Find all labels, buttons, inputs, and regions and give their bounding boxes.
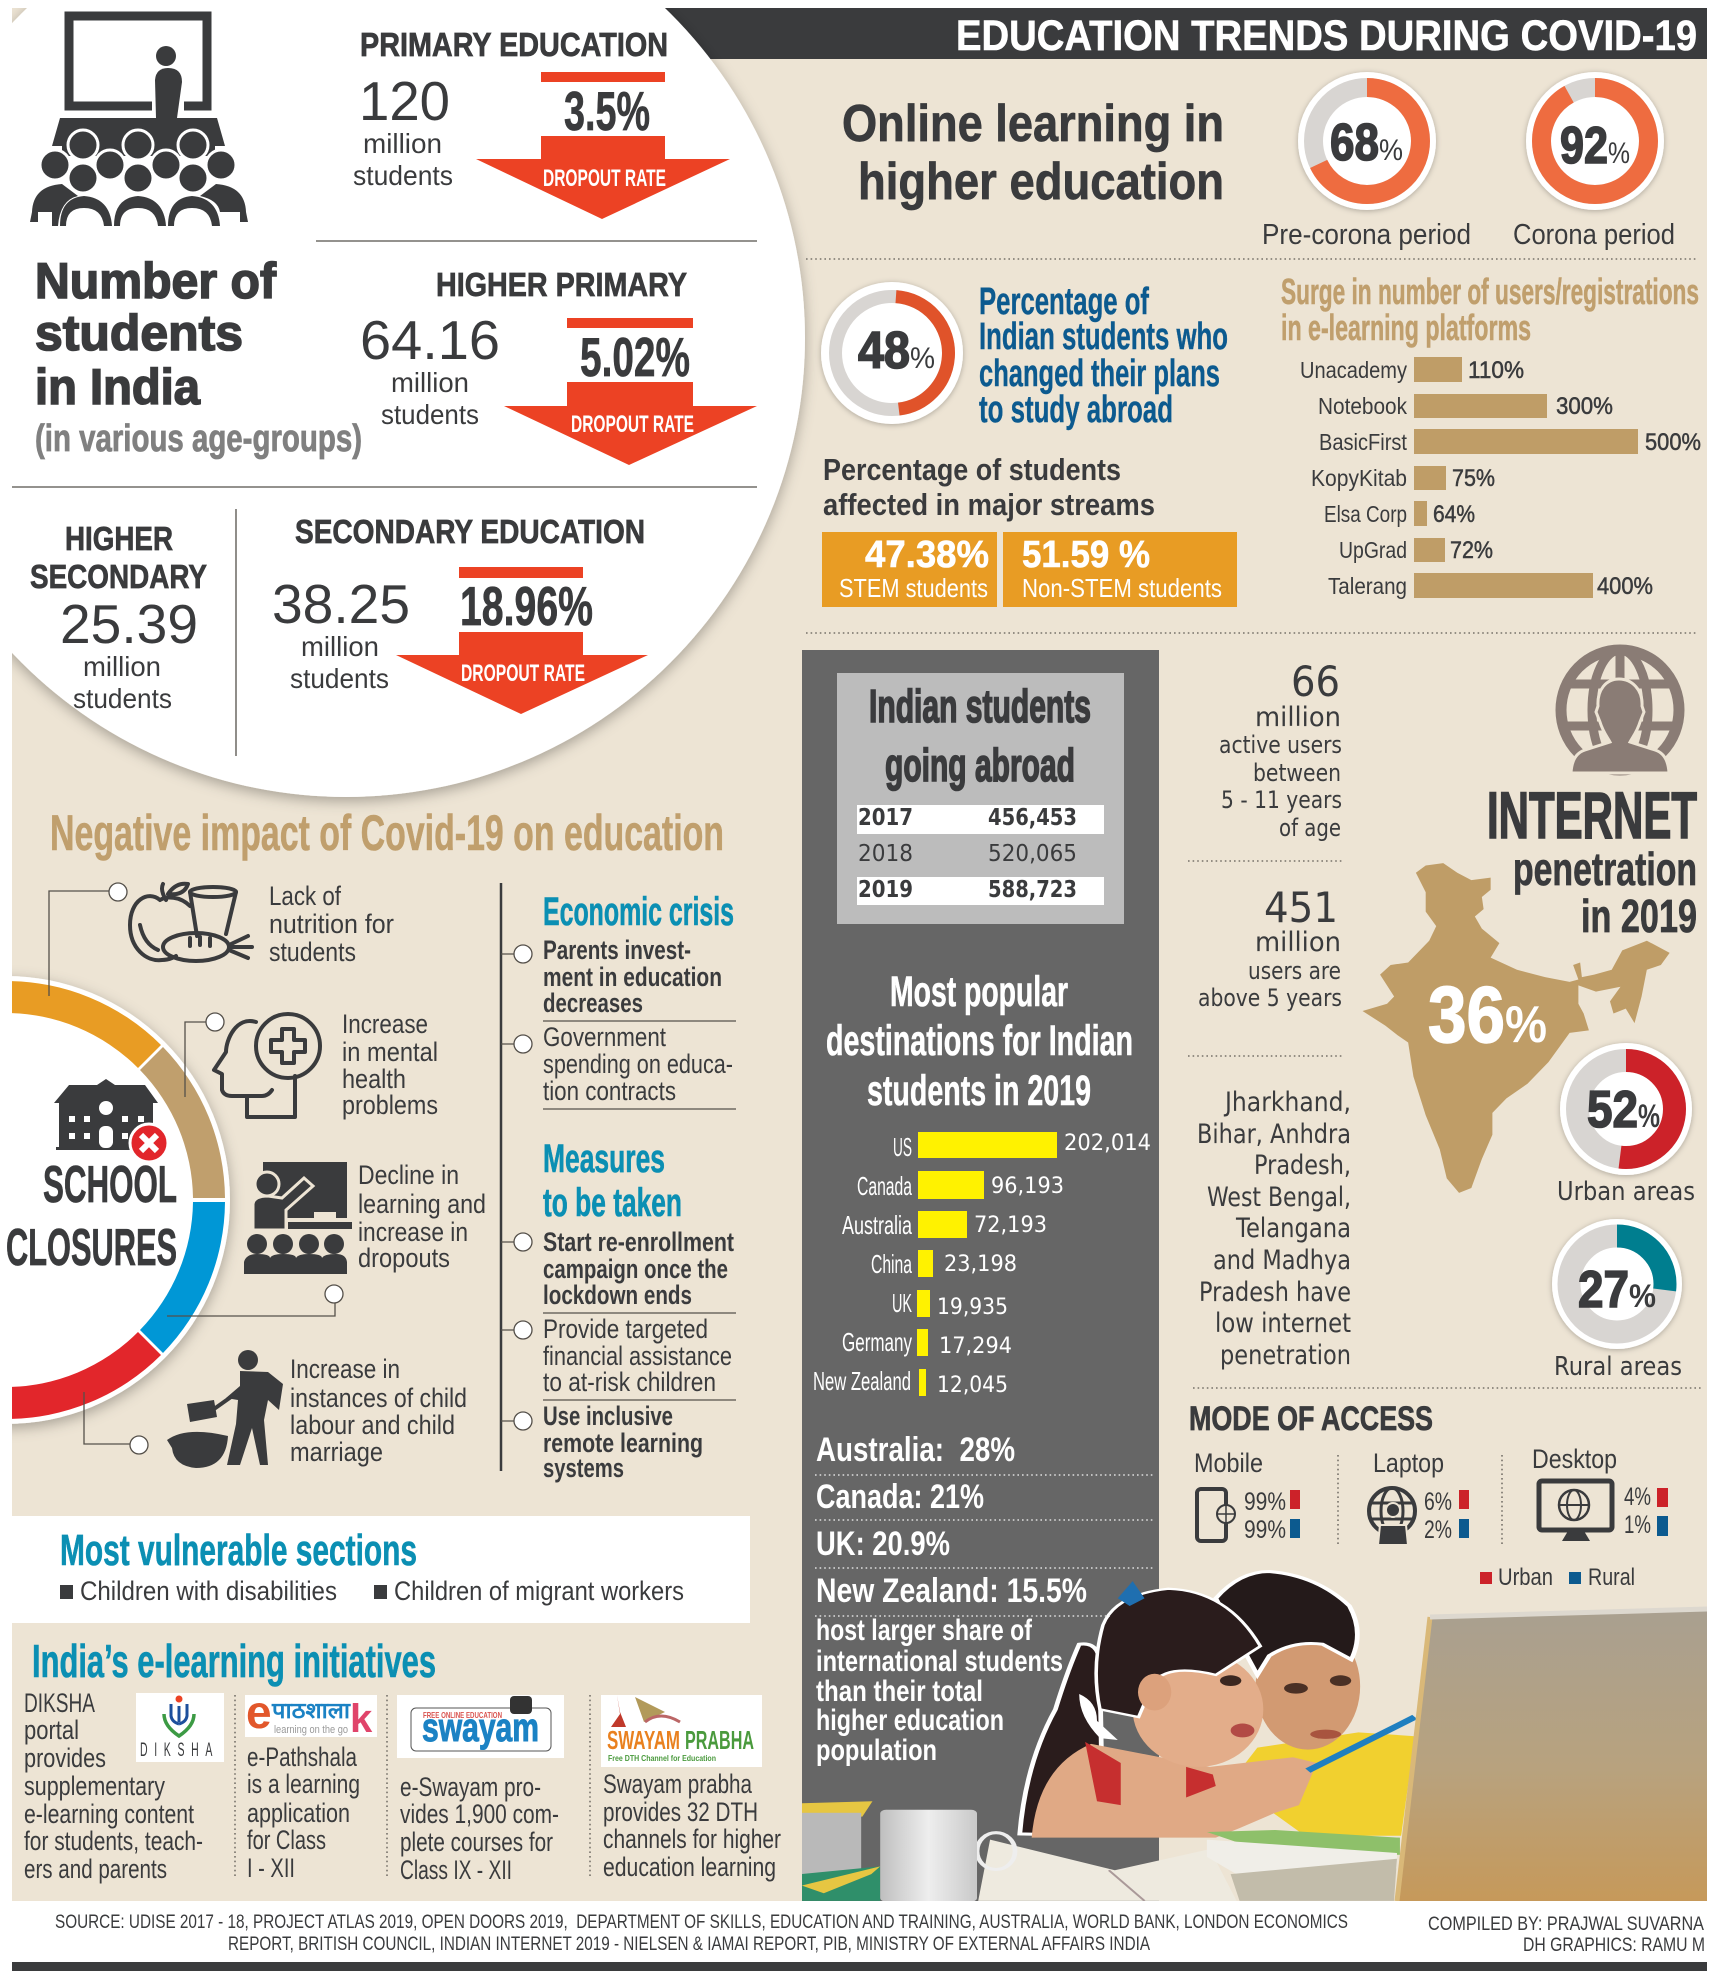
panel: most vulnerable sections: Children of migrant workers xyxy=(394,1576,684,1606)
panel: most vulnerable sections xyxy=(12,1516,750,1623)
text: low penetration states: low internet xyxy=(1215,1308,1351,1339)
bar chart: surge in e-learning platforms: 64% xyxy=(1433,501,1475,528)
bar chart: surge in e-learning platforms: 300% xyxy=(1556,393,1613,420)
donut: urban areas 52% xyxy=(1557,1043,1695,1207)
logo: e-Pathshala xyxy=(245,1686,377,1741)
heading: school closures xyxy=(6,1156,177,1277)
block: higher primary: students xyxy=(381,399,479,430)
footer: sources xyxy=(55,1912,1348,1955)
icon: mental health head xyxy=(214,1014,320,1117)
table: Indian students going abroad: 2019 xyxy=(858,877,913,903)
bar chart: surge in e-learning platforms: Unacademy xyxy=(1300,357,1407,383)
panel: active users text: 66 xyxy=(1291,657,1340,706)
donut: pre-corona 68%: % xyxy=(1379,134,1403,167)
panel: most vulnerable sections: Most vulnerable sections xyxy=(60,1526,417,1575)
connector: child labour xyxy=(84,1392,148,1454)
mode: desktop: Desktop xyxy=(1532,1444,1617,1474)
logo: DIKSHA: DIKSHA xyxy=(140,1740,219,1761)
text: Swayam Prabha: provides 32 DTH xyxy=(603,1797,758,1827)
bar chart: popular destinations: New Zealand xyxy=(813,1366,911,1396)
bar chart: popular destinations: 17,294 xyxy=(939,1334,1012,1359)
heading: number of students: students xyxy=(35,305,243,361)
text: DIKSHA: DIKSHA xyxy=(24,1688,95,1718)
text: share of international students: higher education xyxy=(816,1704,1004,1737)
block: higher primary: 64.16 xyxy=(360,309,500,371)
text: nutrition: nutrition for xyxy=(269,909,394,939)
heading: number of students: (in various age-groups) xyxy=(35,418,362,460)
bar chart: popular destinations: 202,014 xyxy=(1064,1131,1151,1156)
callout: non-STEM students xyxy=(1003,532,1237,607)
heading: school closures: CLOSURES xyxy=(6,1219,177,1277)
text: low penetration states: Pradesh have xyxy=(1199,1277,1351,1308)
connector: learning xyxy=(167,1285,343,1316)
text: low penetration states: Telangana xyxy=(1235,1213,1351,1244)
mode: desktop xyxy=(1532,1444,1668,1541)
icon: closed school xyxy=(54,1079,168,1162)
text: mental health xyxy=(342,1009,438,1120)
heading: number of students: Number of xyxy=(35,253,276,309)
callout: STEM students xyxy=(822,532,997,607)
legend: urban and rural xyxy=(1480,1564,1635,1591)
block: higher secondary: HIGHER xyxy=(65,520,173,557)
text: re-enrollment xyxy=(543,1227,734,1310)
map: India 36%: 36 xyxy=(1428,970,1505,1059)
block: secondary education: million xyxy=(301,631,379,662)
text: remote learning xyxy=(543,1401,703,1483)
logo: e-Pathshala: e xyxy=(246,1686,272,1738)
text: share of international students: host larger share of xyxy=(816,1614,1033,1647)
mode: laptop: 6% xyxy=(1424,1488,1452,1516)
bar chart: surge in e-learning platforms: 500% xyxy=(1645,429,1701,456)
text: learning decline: learning and xyxy=(358,1189,486,1219)
table: Indian students going abroad: 2018 xyxy=(858,841,913,867)
mug xyxy=(880,1810,1015,1902)
text: DIKSHA: provides xyxy=(24,1743,106,1773)
text: mental health: health xyxy=(342,1064,406,1094)
text: DIKSHA: ers and parents xyxy=(24,1854,167,1884)
text: DIKSHA: for students, teach- xyxy=(24,1826,203,1856)
text: low penetration states xyxy=(1197,1087,1351,1371)
bar chart: popular destinations xyxy=(813,968,1151,1398)
text: e-Pathshala: application xyxy=(247,1798,350,1828)
bar chart: popular destinations: US xyxy=(893,1132,912,1162)
bar chart: popular destinations: 96,193 xyxy=(991,1174,1064,1199)
pencil xyxy=(1308,1717,1415,1771)
text: streams heading: Percentage of students xyxy=(823,452,1121,487)
text: e-Pathshala: I - XII xyxy=(247,1853,295,1883)
panel: active users text: 5 - 11 years xyxy=(1221,786,1342,814)
map: India 36%: % xyxy=(1505,996,1547,1054)
text: re-enrollment: lockdown ends xyxy=(543,1280,692,1310)
block: primary education: 120 xyxy=(359,70,450,132)
heading: surge xyxy=(1281,271,1699,348)
text: share of international students: UK: 20.9% xyxy=(816,1525,950,1563)
text: financial assistance: financial assistance xyxy=(543,1341,732,1371)
diagram: school closures ring xyxy=(0,976,230,1424)
open book xyxy=(978,1840,1237,1901)
heading: online learning xyxy=(842,95,1224,211)
notebooks xyxy=(1207,1830,1400,1855)
donut: urban areas 52%: 52 xyxy=(1587,1081,1638,1139)
logo: Swayam Prabha: SWAYAM xyxy=(607,1725,680,1755)
text: government spending xyxy=(543,1022,733,1106)
panel: number of students in India xyxy=(0,0,805,797)
text: share of international students: than their total xyxy=(816,1675,983,1708)
title bar xyxy=(600,8,1707,60)
icon: globe with person xyxy=(1561,650,1679,773)
text: e-Swayam xyxy=(400,1772,559,1885)
mode: mobile: 99% xyxy=(1244,1516,1286,1544)
heading: economic crisis: Economic crisis xyxy=(543,890,734,934)
mode: laptop: 2% xyxy=(1424,1516,1452,1544)
panel: active users text: million xyxy=(1255,927,1341,958)
text: remote learning: Use inclusive xyxy=(543,1401,673,1431)
text: e-Swayam: Class IX - XII xyxy=(400,1855,512,1885)
bar chart: popular destinations: students in 2019 xyxy=(867,1067,1091,1115)
illustration: children at laptop xyxy=(802,1572,1707,1902)
block: primary education xyxy=(353,26,730,219)
donut: corona 92%: % xyxy=(1608,137,1630,170)
panel: Indian students abroad (dark) xyxy=(802,650,1159,1901)
table: Indian students going abroad: 2017 xyxy=(858,805,913,831)
text: government spending: spending on educa- xyxy=(543,1049,733,1079)
text: share of international students xyxy=(815,1431,1153,1767)
donut: 48% xyxy=(821,282,963,424)
panel: students who changed plans xyxy=(821,281,1237,607)
donut: pre-corona 68%: Pre-corona period xyxy=(1262,219,1471,251)
block: higher primary: DROPOUT RATE xyxy=(571,411,694,438)
text: e-Pathshala: is a learning xyxy=(247,1769,360,1799)
table: Indian students going abroad: going abroad xyxy=(885,739,1075,791)
icon: child labour xyxy=(167,1350,283,1468)
donut: 48%: 48 xyxy=(858,322,910,380)
block: higher primary: 5.02% xyxy=(580,326,690,388)
text: nutrition: Lack of xyxy=(269,881,341,911)
text: e-Pathshala xyxy=(247,1742,360,1883)
bar chart: popular destinations: China xyxy=(871,1249,912,1279)
bar chart: popular destinations: 23,198 xyxy=(944,1252,1017,1277)
callout: STEM students: 47.38% xyxy=(865,534,989,576)
logo: Swayam Prabha: Free DTH Channel for Education xyxy=(608,1754,716,1763)
block: higher secondary: million xyxy=(83,651,161,682)
heading: e-learning initiatives: India’s e-learning initiatives xyxy=(32,1635,436,1687)
panel: active users text: between xyxy=(1253,759,1341,787)
text: low penetration states: and Madhya xyxy=(1213,1245,1351,1276)
bar chart: popular destinations: Most popular xyxy=(890,968,1068,1016)
mode: desktop: 1% xyxy=(1624,1511,1651,1539)
panel: active users text: users are xyxy=(1248,957,1341,985)
bar chart: surge in e-learning platforms: UpGrad xyxy=(1339,537,1407,563)
heading: measures to be taken: Measures xyxy=(543,1137,665,1181)
panel: online learning in higher education xyxy=(842,72,1675,251)
text: financial assistance xyxy=(543,1314,732,1397)
text: Swayam Prabha: channels for higher xyxy=(603,1824,781,1854)
block: primary education: DROPOUT RATE xyxy=(543,165,666,192)
text: child labour: marriage xyxy=(290,1437,383,1467)
footer: sources: REPORT, BRITISH COUNCIL, INDIAN INTERNET 2019 - NIELSEN & IAMAI REPORT, PIB, MINISTRY OF EXTERNAL AFFAIRS INDIA xyxy=(228,1934,1150,1955)
bar chart: surge in e-learning platforms: 75% xyxy=(1452,465,1495,492)
bar chart: surge in e-learning platforms: Elsa Corp xyxy=(1324,501,1407,527)
footer: credits xyxy=(1428,1914,1705,1956)
bar chart: popular destinations: 72,193 xyxy=(974,1213,1047,1238)
text: remote learning: remote learning xyxy=(543,1428,703,1458)
text: e-Swayam: plete courses for xyxy=(400,1827,553,1857)
text: remote learning: systems xyxy=(543,1453,624,1483)
donut: corona 92% xyxy=(1513,72,1675,251)
bar chart: surge in e-learning platforms: BasicFirst xyxy=(1319,429,1408,455)
text: percentage changed plans: to study abroad xyxy=(979,389,1173,431)
girl ponytail xyxy=(1020,1644,1103,1836)
text: e-Pathshala: e-Pathshala xyxy=(247,1742,358,1772)
girl xyxy=(1032,1581,1317,1838)
table: Indian students going abroad: 588,723 xyxy=(988,877,1077,903)
bar chart: surge in e-learning platforms xyxy=(1281,271,1701,600)
block: higher secondary: students xyxy=(73,683,172,714)
text: mental health: in mental xyxy=(342,1037,438,1067)
heading: online learning: higher education xyxy=(858,153,1224,211)
donut: pre-corona 68% xyxy=(1262,72,1471,251)
logo: e-Pathshala: k xyxy=(350,1697,373,1741)
text: learning decline xyxy=(358,1160,486,1273)
text: streams heading xyxy=(823,452,1155,522)
boy xyxy=(1216,1572,1415,1836)
heading: number of students xyxy=(35,253,362,460)
heading: school closures: SCHOOL xyxy=(43,1156,177,1214)
logo: Swayam xyxy=(397,1695,564,1758)
table: Indian students going abroad: Indian students xyxy=(869,680,1091,732)
bar chart: popular destinations: 19,935 xyxy=(937,1295,1008,1320)
block: primary education: 3.5% xyxy=(564,80,650,142)
text: percentage changed plans: Indian students who xyxy=(979,316,1228,358)
bar chart: surge in e-learning platforms: Notebook xyxy=(1318,393,1407,419)
legend: urban and rural: Urban xyxy=(1498,1564,1553,1591)
text: percentage changed plans xyxy=(979,281,1228,431)
donut: rural areas 27%: % xyxy=(1629,1278,1656,1314)
text: share of international students: international students xyxy=(816,1645,1063,1678)
books stack xyxy=(802,1801,880,1901)
callout: non-STEM students: 51.59 % xyxy=(1022,534,1150,576)
logo: Swayam: FREE ONLINE EDUCATION xyxy=(423,1710,502,1720)
panel: most vulnerable sections: Children with disabilities xyxy=(80,1576,337,1606)
donut: pre-corona 68%: 68 xyxy=(1330,114,1379,172)
text: share of international students: population xyxy=(816,1734,937,1767)
logo: e-Pathshala: पाठशाला xyxy=(271,1698,351,1723)
ticks and bullets xyxy=(501,945,532,1430)
logo: DIKSHA xyxy=(136,1693,224,1762)
table: Indian students going abroad: 456,453 xyxy=(988,805,1077,831)
laptop screen xyxy=(1397,1609,1707,1901)
block: secondary education: 38.25 xyxy=(272,573,410,635)
text: DIKSHA: e-learning content xyxy=(24,1799,194,1829)
text: e-Pathshala: for Class xyxy=(247,1825,326,1855)
bar chart: popular destinations: UK xyxy=(892,1288,912,1318)
text: DIKSHA: supplementary xyxy=(24,1771,165,1801)
panel: active users text: of age xyxy=(1279,814,1341,842)
heading: number of students: in India xyxy=(35,359,201,415)
logo: Swayam Prabha: PRABHA xyxy=(685,1725,754,1755)
donut: rural areas 27% xyxy=(1552,1219,1682,1382)
text: low penetration states: West Bengal, xyxy=(1207,1182,1351,1213)
text: re-enrollment: campaign once the xyxy=(543,1254,728,1284)
text: streams heading: affected in major streams xyxy=(823,487,1155,522)
text: Swayam Prabha xyxy=(603,1769,781,1882)
text: low penetration states: Bihar, Anhdra xyxy=(1197,1119,1351,1150)
table: Indian students going abroad: 520,065 xyxy=(988,841,1077,867)
panel: active users text xyxy=(1188,657,1342,1056)
bar chart: surge in e-learning platforms: 110% xyxy=(1468,357,1524,384)
text: learning decline: increase in xyxy=(358,1217,468,1247)
text: mental health: Increase xyxy=(342,1009,428,1039)
mode: mobile: 99% xyxy=(1244,1488,1286,1516)
panel: active users text: 451 xyxy=(1264,883,1338,932)
heading: measures to be taken: to be taken xyxy=(543,1181,682,1225)
footer: sources: SOURCE: UDISE 2017 - 18, PROJECT ATLAS 2019, OPEN DOORS 2019, DEPARTMENT OF SKILLS, EDUCATION AND TRAINING, AUSTRALIA, WORLD BANK, LONDON ECONOMICS xyxy=(55,1912,1348,1933)
text: low penetration states: penetration xyxy=(1220,1340,1351,1371)
logo: e-Pathshala: learning on the go xyxy=(274,1724,348,1736)
text: financial assistance: Provide targeted xyxy=(543,1314,708,1344)
panel: India's e-learning initiatives xyxy=(24,1635,781,1885)
mode: mobile: Mobile xyxy=(1194,1448,1263,1478)
block: primary education: million xyxy=(363,128,442,159)
block: higher secondary: 25.39 xyxy=(60,593,198,655)
block: higher primary: HIGHER PRIMARY xyxy=(436,266,687,303)
donut: corona 92%: Corona period xyxy=(1513,219,1675,251)
callout: STEM students: STEM students xyxy=(839,573,988,603)
text: DIKSHA xyxy=(24,1688,203,1884)
text: low penetration states: Jharkhand, xyxy=(1223,1087,1351,1118)
panel: active users text: above 5 years xyxy=(1198,984,1342,1012)
bar chart: popular destinations: Australia xyxy=(842,1210,912,1240)
block: secondary education: DROPOUT RATE xyxy=(461,660,585,687)
block: secondary education: students xyxy=(290,663,389,694)
bar chart: popular destinations: 12,045 xyxy=(937,1373,1008,1398)
heading: negative impact: Negative impact of Covid-19 on education xyxy=(50,805,724,861)
text: financial assistance: to at-risk children xyxy=(543,1367,716,1397)
text: nutrition: students xyxy=(269,937,356,967)
text: low penetration states: Pradesh, xyxy=(1254,1150,1351,1181)
mode: laptop: Laptop xyxy=(1373,1448,1444,1478)
legend: urban and rural: Rural xyxy=(1588,1564,1635,1591)
bar chart: surge in e-learning platforms: KopyKitab xyxy=(1311,465,1407,491)
text: share of international students: Australia: 28% xyxy=(816,1431,1015,1469)
text: child labour: Increase in xyxy=(290,1354,400,1384)
text: mental health: problems xyxy=(342,1090,438,1120)
block: higher primary: million xyxy=(391,367,469,398)
text: DIKSHA: portal xyxy=(24,1715,79,1745)
donut: urban areas 52%: Urban areas xyxy=(1557,1177,1695,1207)
text: nutrition xyxy=(269,881,394,967)
text: parents investment xyxy=(543,935,722,1018)
block: primary education: students xyxy=(353,160,453,191)
icon: teacher and dropouts xyxy=(244,1162,352,1274)
panel: negative impact of Covid-19 xyxy=(0,805,736,1483)
block: secondary education: 18.96% xyxy=(460,575,593,637)
panel: mode of access: MODE OF ACCESS xyxy=(1189,1400,1433,1438)
bottom rule xyxy=(12,1962,1707,1971)
text: government spending: tion contracts xyxy=(543,1076,676,1106)
text: child labour: instances of child xyxy=(290,1383,467,1413)
text: share of international students: New Zealand: 15.5% xyxy=(816,1572,1087,1610)
block: secondary education xyxy=(272,513,648,714)
logo: Swayam Prabha xyxy=(601,1695,762,1767)
mode: desktop: 4% xyxy=(1624,1483,1651,1511)
text: share of international students: Canada: 21% xyxy=(816,1478,984,1516)
block: primary education: PRIMARY EDUCATION xyxy=(360,26,668,63)
text: parents investment: decreases xyxy=(543,988,643,1018)
bar chart: popular destinations: Canada xyxy=(857,1171,912,1201)
donut: corona 92%: 92 xyxy=(1560,117,1608,175)
text: re-enrollment: Start re-enrollment xyxy=(543,1227,734,1257)
bar chart: popular destinations: Germany xyxy=(842,1327,912,1357)
block: higher secondary: SECONDARY xyxy=(30,558,207,595)
panel: mode of access xyxy=(1189,1400,1668,1591)
donut: rural areas 27%: Rural areas xyxy=(1554,1352,1682,1382)
icon: classroom xyxy=(30,16,248,226)
text: child labour: labour and child xyxy=(290,1410,455,1440)
heading: online learning: Online learning in xyxy=(842,95,1224,153)
bar chart: popular destinations: destinations for Indian xyxy=(826,1017,1133,1065)
connector: mental health xyxy=(185,1013,224,1097)
text: parents investment: ment in education xyxy=(543,962,722,992)
donut: urban areas 52%: % xyxy=(1638,1098,1660,1134)
heading: internet penetration xyxy=(1487,778,1697,942)
table: Indian students going abroad xyxy=(837,673,1124,924)
donut: 48%: % xyxy=(910,342,935,375)
donut: rural areas 27%: 27 xyxy=(1578,1261,1629,1319)
text: e-Swayam: e-Swayam pro- xyxy=(400,1772,541,1802)
text: Swayam Prabha: education learning xyxy=(603,1852,776,1882)
logo: Swayam: swayam xyxy=(422,1706,539,1750)
text: child labour xyxy=(290,1354,467,1467)
connector: nutrition xyxy=(49,883,127,996)
panel: active users text: million xyxy=(1255,702,1341,733)
text: learning decline: dropouts xyxy=(358,1243,450,1273)
text: Swayam Prabha: Swayam prabha xyxy=(603,1769,753,1799)
block: higher primary xyxy=(360,266,757,465)
icon: food xyxy=(130,884,252,961)
text: percentage changed plans: changed their plans xyxy=(979,353,1220,395)
text: learning decline: Decline in xyxy=(358,1160,459,1190)
text: parents investment: Parents invest- xyxy=(543,935,691,965)
map: India 36% xyxy=(1363,863,1670,1193)
text: government spending: Government xyxy=(543,1022,666,1052)
block: secondary education: SECONDARY EDUCATION xyxy=(295,513,645,550)
bar chart: surge in e-learning platforms: 400% xyxy=(1597,573,1653,600)
text: e-Swayam: vides 1,900 com- xyxy=(400,1799,559,1829)
heading: surge: in e-learning platforms xyxy=(1281,307,1531,348)
callout: non-STEM students: Non-STEM students xyxy=(1022,573,1222,603)
heading: measures to be taken xyxy=(543,1137,682,1225)
bar chart: surge in e-learning platforms: Talerang xyxy=(1328,573,1407,599)
panel: active users text: active users xyxy=(1219,731,1342,759)
mode: laptop xyxy=(1369,1448,1469,1545)
block: higher secondary xyxy=(30,520,207,714)
bar chart: surge in e-learning platforms: 72% xyxy=(1450,537,1493,564)
mode: mobile xyxy=(1194,1448,1300,1544)
text: percentage changed plans: Percentage of xyxy=(979,281,1149,323)
